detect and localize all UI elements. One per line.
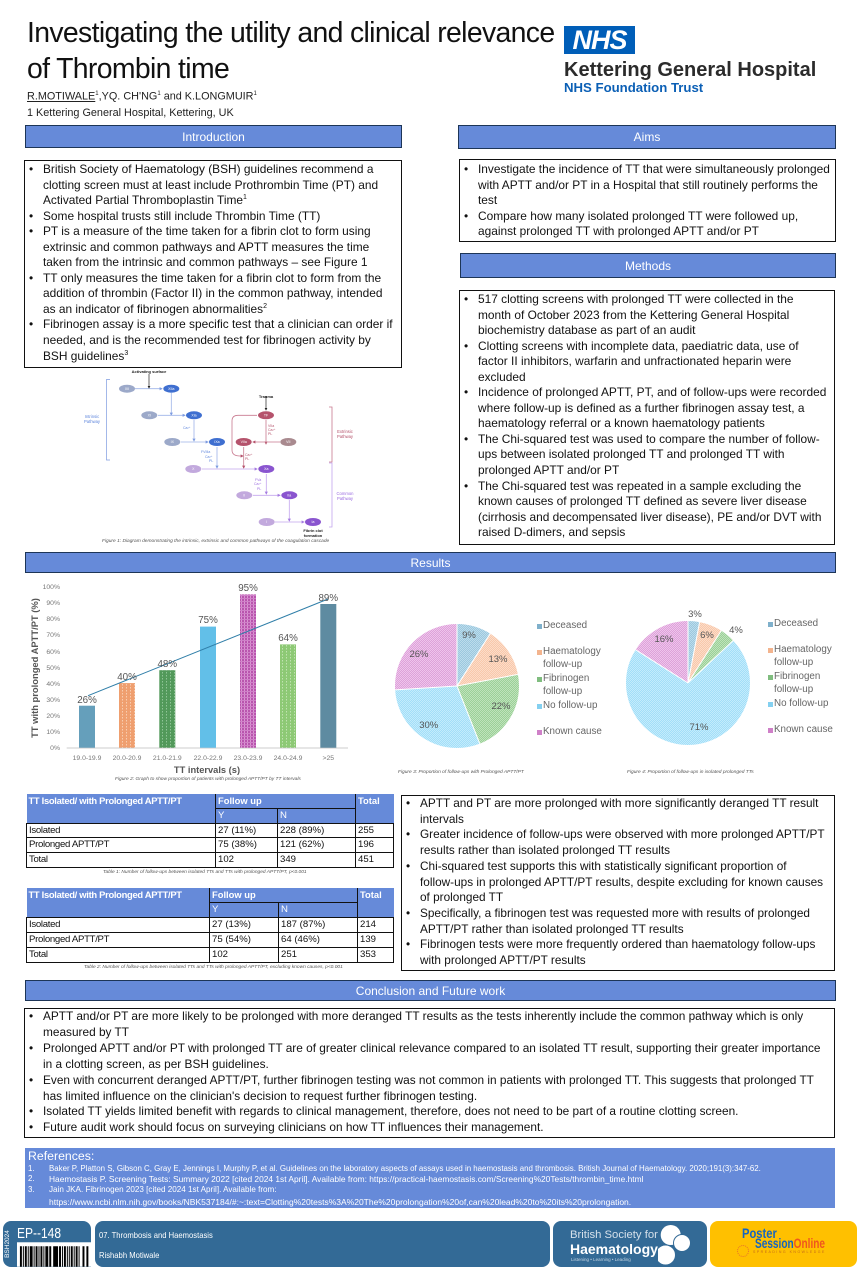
panel: methods text (459, 290, 835, 545)
panel: methods text: known causes of prolonged TT defined as severe liver disease (478, 494, 807, 508)
trust name: NHS Foundation Trust (564, 80, 703, 95)
caption: figure 1: Figure 1: Diagram demonstrating the intrinsic, extrinsic and common pathways of the coagulation cascade (102, 539, 329, 544)
chart: coagulation cascade diagram: VII (286, 440, 290, 444)
legend item: Known cause: Known cause (774, 724, 833, 735)
chart: bar chart of TT intervals: 50% (46, 665, 60, 672)
society name: British Society for (570, 1229, 658, 1241)
table 1: follow-ups: Y (218, 810, 224, 821)
chart: bar chart of TT intervals: 90% (46, 600, 60, 607)
chart: coagulation cascade diagram: PL (209, 459, 213, 463)
legend: pie 1 (537, 620, 602, 737)
panel: results findings: Fibrinogen tests were more frequently ordered than haematology follow-ups (420, 937, 815, 951)
panel: aims text (459, 159, 836, 242)
heading: Results: Results (410, 556, 450, 570)
chart: coagulation cascade diagram: TF (264, 414, 268, 418)
chart: coagulation cascade diagram: II (243, 494, 245, 498)
panel: methods text: The Chi-squared test was repeated in a sample excluding the (478, 479, 801, 493)
chart: pie of follow-ups with prolonged APTT/PT: 22% (491, 701, 511, 712)
authors: 1 Kettering General Hospital, Kettering, UK (27, 107, 234, 119)
chart: bar chart of TT intervals: 75% (198, 615, 218, 626)
panel: results findings: intervals (420, 812, 464, 826)
panel: conclusion text: Isolated TT yields limited benefit with regards to clinical management, therefore, does not need to be part of a routine clotting screen. (43, 1104, 738, 1118)
panel: introduction text: extrinsic and common pathways and APTT measures the time (43, 240, 369, 254)
panel: methods text: excluded (478, 370, 526, 384)
reference list: Baker P, Platton S, Gibson C, Gray E, Jennings I, Murphy P, et al. Guidelines on the laboratory aspects of assays used in haemostasis and thrombosis. British Journal of Haematology. 2020;191(3):347-62. (49, 1164, 761, 1173)
chart: bar chart of TT intervals: 0% (50, 745, 60, 752)
legend item: Fibrinogen follow-up: Fibrinogen (543, 673, 589, 684)
panel: references (25, 1148, 835, 1208)
chart: bar chart of TT intervals: 30% (46, 697, 60, 704)
panel: methods text: Incidence of prolonged APTT, PT, and of follow-ups were recorded (478, 385, 826, 399)
authors (27, 90, 257, 119)
footer: session and presenter (95, 1221, 550, 1267)
title: Investigating the utility and clinical relevance (27, 17, 554, 49)
panel: methods text: raised D-dimers, and sepsis (478, 525, 625, 539)
title: of Thrombin time (27, 52, 229, 84)
caption: figure 4: Figure 4: Proportion of follow-ups in isolated prolonged TTs (627, 770, 754, 775)
panel: methods text: where follow-up is defined as a further fibrinogen assay test, a (478, 401, 805, 415)
table 2: follow-ups excluding known causes: 27 (13%) (212, 919, 251, 930)
panel: conclusion text: has limited influence on the clinician's decision to request further fibrinogen testing. (43, 1089, 477, 1103)
panel: results findings: results rather than isolated prolonged TT results (420, 843, 670, 857)
word: Session Online: SessionOnline (755, 1235, 825, 1251)
panel: methods text: 517 clotting screens with prolonged TT were collected in the (478, 292, 794, 306)
chart: bar chart of TT intervals: TT with prolonged APTT/PT (%) (29, 598, 40, 738)
chart: coagulation cascade diagram: Trauma (259, 394, 274, 399)
panel: introduction text: Activated Partial Thromboplastin Time1 (43, 193, 247, 207)
table 2: follow-ups excluding known causes: Prolonged APTT/PT (29, 934, 109, 945)
chart: coagulation cascade diagram: Ca²⁺ (254, 482, 262, 486)
chart: coagulation cascade diagram: FVIIIa (201, 450, 210, 454)
panel: results findings: APTT/PT rather than isolated prolonged TT results (420, 922, 684, 936)
table 1: follow-ups: N (280, 810, 287, 821)
legend item: Haematology follow-up: follow-up (543, 659, 582, 670)
panel: aims text: with APTT and/or PT in a Hospital that still routinely performs the (478, 178, 818, 192)
logo: Kettering General Hospital NHS (564, 25, 816, 95)
panel: results findings: of prolonged TT (420, 890, 503, 904)
legend item: No follow-up: No follow-up (774, 698, 828, 709)
chart: pie of follow-ups with prolonged APTT/PT (395, 624, 519, 748)
panel: introduction text: as an indicator of fibrinogen abnormalities2 (43, 302, 267, 316)
reference list: 1. (28, 1164, 35, 1173)
panel: methods text: The Chi-squared test was used to compare the number of follow- (478, 432, 820, 446)
table 2: follow-ups excluding known causes (26, 888, 394, 963)
chart: coagulation cascade diagram: Pathway (84, 419, 101, 424)
chart: coagulation cascade diagram: XI (148, 414, 151, 418)
panel: results findings: follow-ups in prolonged APTT/PT results, despite excluding for known causes (420, 875, 823, 889)
poster number: EP--148 (17, 1225, 61, 1242)
panel: methods text: factor II inhibitors, warfarin and unfractionated heparin were (478, 354, 791, 368)
icon: three circles (658, 1225, 690, 1264)
barcode (17, 1242, 91, 1267)
chart: pie of follow-ups in isolated prolonged TT: 3% (688, 609, 702, 620)
chart: pie of follow-ups with prolonged APTT/PT: 9% (462, 630, 476, 641)
panel: methods text: Clotting screens with incomplete data, paediatric data, use of (478, 339, 799, 353)
chart: coagulation cascade diagram: Activating surface (132, 369, 167, 374)
chart: coagulation cascade diagram: XII (125, 387, 129, 391)
legend item: Haematology follow-up (768, 644, 832, 668)
chart: coagulation cascade diagram: Ia (312, 520, 315, 524)
chart: coagulation cascade diagram: Fibrin clot (303, 528, 323, 533)
table 1: follow-ups: Total (358, 795, 380, 806)
heading: Results (25, 552, 836, 573)
chart: bar chart of TT intervals: 95% (238, 583, 258, 594)
legend item: Deceased: Deceased (543, 620, 587, 631)
panel: aims text: Compare how many isolated prolonged TT were followed up, (478, 209, 798, 223)
vertical tag: BSH2024 (4, 1230, 11, 1258)
panel: results findings: Greater incidence of follow-ups were observed with more prolonged APTT/PT (420, 827, 825, 841)
chart: bar chart of TT intervals: 89% (318, 593, 338, 604)
reference list: https://www.ncbi.nlm.nih.gov/books/NBK537184/#:~:text=Clotting%20tests%3A%20The%20prolongation%20of,can%20lead%20to%20its%20prolongation. (49, 1196, 631, 1206)
chart: pie of follow-ups with prolonged APTT/PT: 13% (488, 654, 508, 665)
panel: methods text: prolonged APTT and/or PT (478, 463, 619, 477)
legend item: Haematology follow-up: Haematology (774, 644, 832, 655)
panel: results findings: Chi-squared test supports this with statistically significant proportion of (420, 859, 787, 873)
panel: introduction text: PT is a measure of the time taken for a fibrin clot to form using (43, 224, 371, 238)
table 1: follow-ups: 75 (38%) (218, 839, 257, 850)
table 1: follow-ups: 27 (11%) (218, 824, 256, 836)
table 1: follow-ups: 451 (358, 854, 374, 865)
reference list (28, 1164, 761, 1206)
reference list: Haemostasis P. Screening Tests: Summary 2022 [cited 2024 1st April]. Available from: https://practical-haemostasis.com/Screening%20Tests/thrombin_time.html (49, 1174, 643, 1184)
table 2: follow-ups excluding known causes: 353 (360, 949, 376, 960)
word: Poster: Poster (742, 1225, 777, 1241)
legend item: Fibrinogen follow-up: Fibrinogen (774, 671, 820, 682)
legend item: No follow-up: No follow-up (543, 700, 597, 711)
chart: pie of follow-ups in isolated prolonged TT: 16% (654, 634, 674, 645)
heading: Aims: Aims (634, 130, 660, 144)
panel: aims text: test (478, 193, 497, 207)
table 2: follow-ups excluding known causes: 251 (281, 949, 297, 960)
table 1: follow-ups (26, 794, 394, 868)
chart: bar chart of TT intervals: >25 (323, 755, 334, 762)
chart: coagulation cascade diagram: PL (268, 432, 272, 436)
authors: R.MOTIWALE1,YQ. CH'NG1 and K.LONGMUIR1 (27, 91, 257, 103)
chart: bar chart of TT intervals: 24.0-24.9 (274, 755, 303, 762)
panel: conclusion text: Even with concurrent deranged APTT/PT, further fibrinogen testing was not common in patients with prolonged TT. This suggests that prolonged TT (43, 1073, 814, 1087)
table 2: follow-ups excluding known causes: N (281, 904, 288, 915)
chart: coagulation cascade diagram: IXa (214, 440, 220, 444)
heading: Methods: Methods (625, 259, 671, 273)
reference list: Jain JKA. Fibrinogen 2023 [cited 2024 1st April]. Available from: (49, 1185, 277, 1194)
panel: methods text: ups between isolated prolonged TT and prolonged TT with (478, 447, 785, 461)
chart: coagulation cascade diagram: PL (257, 487, 261, 491)
table 2: follow-ups excluding known causes: 214 (360, 919, 376, 930)
panel: results findings: with prolonged APTT/PT results (420, 953, 586, 967)
session title: 07. Thrombosis and Haemostasis (99, 1230, 213, 1240)
chart: coagulation cascade diagram: Ca²⁺ (268, 428, 276, 432)
panel: methods text: (cirrhosis and decompensated liver disease), PE and/or DVT with (478, 510, 821, 524)
panel: results findings: APTT and PT are more prolonged with more significantly deranged TT result (420, 796, 818, 810)
chart: bar chart of TT intervals: 26% (77, 695, 97, 706)
panel: conclusion text: APTT and/or PT are more likely to be prolonged with more deranged TT results as the tests inherently include the common pathway which is only (43, 1009, 803, 1023)
panel: results findings (401, 795, 835, 971)
panel: introduction text: TT only measures the time taken for a fibrin clot to form from the (43, 271, 381, 285)
chart: coagulation cascade diagram: Pathway (337, 496, 354, 501)
icon: NHS lozenge: NHS (572, 25, 626, 55)
footer: poster ID and barcode (3, 1221, 91, 1267)
chart: bar chart of TT intervals: 48% (157, 659, 177, 670)
tagline: SPREADING KNOWLEDGE (753, 1250, 826, 1254)
table 2: follow-ups excluding known causes: 64 (46%) (281, 934, 320, 945)
chart: coagulation cascade diagram: PL (245, 457, 249, 461)
table 2: follow-ups excluding known causes: 102 (212, 949, 228, 960)
caption: table 2: Table 2: Number of follow-ups between isolated TTs and TTs with prolonged APTT/PT, excluding known causes, p<0.001 (84, 965, 343, 970)
reference list: 3. (28, 1185, 35, 1194)
panel: conclusion text: Prolonged APTT and/or PT with prolonged TT are of greater clinical relevance compared to an isolated TT result, supporting their greater importance (43, 1041, 821, 1055)
chart: bar chart of TT intervals: 64% (278, 633, 298, 644)
panel: introduction text: taken from the intrinsic and common pathways – see Figure 1 (43, 255, 368, 269)
legend item: Fibrinogen follow-up: follow-up (774, 684, 813, 695)
table 1: follow-ups: 102 (218, 854, 234, 865)
icon: dotted globe (737, 1245, 749, 1257)
caption: table 1: Table 1: Number of follow-ups between isolated TTs and TTs with prolonged APTT/PT, p<0.001 (103, 870, 307, 875)
chart: bar chart of TT intervals: 19.0-19.9 (73, 755, 102, 762)
chart: bar chart of TT intervals: 100% (43, 584, 60, 591)
table 2: follow-ups excluding known causes: Y (212, 904, 218, 915)
logo: Poster Session Online (710, 1221, 857, 1267)
table 2: follow-ups excluding known causes: 139 (360, 934, 376, 945)
chart: coagulation cascade diagram: Extrinsic (337, 429, 353, 434)
chart: bar chart of TT intervals (29, 583, 348, 775)
heading: Methods (460, 253, 836, 278)
chart: bar chart of TT intervals: 22.0-22.9 (194, 755, 223, 762)
chart: bar chart of TT intervals: TT intervals (s) (174, 765, 240, 775)
caption: figure 2: Figure 2: Graph to show proportion of patients with prolonged APTT/PT by TT intervals (115, 777, 301, 782)
chart: pie of follow-ups with prolonged APTT/PT: 30% (419, 720, 439, 731)
table 1: follow-ups: 196 (358, 839, 374, 850)
chart: bar chart of TT intervals: 70% (46, 632, 60, 639)
chart: bar chart of TT intervals: 21.0-21.9 (153, 755, 182, 762)
chart: coagulation cascade diagram: XIa (191, 414, 197, 418)
chart: pie of follow-ups in isolated prolonged TT (626, 609, 750, 745)
legend item: Fibrinogen follow-up (537, 673, 589, 697)
chart: bar chart of TT intervals: 80% (46, 616, 60, 623)
legend item: Haematology follow-up: Haematology (543, 646, 601, 657)
heading: Introduction (25, 125, 402, 148)
chart: coagulation cascade diagram: Xa (264, 467, 268, 471)
heading: Introduction: Introduction (182, 130, 245, 144)
panel: results findings: Specifically, a fibrinogen test was requested more with results of prolonged (420, 906, 810, 920)
table 1: follow-ups: 255 (358, 824, 374, 836)
chart: coagulation cascade diagram: I (266, 520, 267, 524)
legend: pie 2 (768, 618, 833, 735)
chart: pie of follow-ups in isolated prolonged TT: 71% (689, 722, 709, 733)
chart: bar chart of TT intervals: 23.0-23.9 (234, 755, 263, 762)
tagline: Listening • Learning • Leading (571, 1257, 631, 1262)
panel: conclusion text: in a clotting screen, as per BSH guidelines. (43, 1057, 269, 1071)
panel: conclusion text: Future audit work should focus on surveying clinicians on how TT influences their management. (43, 1120, 544, 1134)
heading: References: References: (28, 1149, 94, 1163)
chart: coagulation cascade diagram: formation (304, 533, 323, 538)
chart: coagulation cascade diagram: Ca²⁺ (183, 426, 191, 430)
chart: coagulation cascade diagram: Ca²⁺ (205, 455, 213, 459)
panel: aims text: Investigate the incidence of TT that were simultaneously prolonged (478, 162, 830, 176)
table 1: follow-ups: Prolonged APTT/PT (29, 839, 109, 850)
caption: figure 3: Figure 3: Proportion of follow-ups with Prolonged APTT/PT (398, 770, 524, 775)
table 1: follow-ups: 349 (280, 854, 296, 865)
table 2: follow-ups excluding known causes: Total (360, 889, 382, 900)
panel: introduction text: clotting screen must at least include Prothrombin Time (PT) and (43, 178, 378, 192)
chart: coagulation cascade diagram: Intrinsic (85, 414, 99, 419)
hospital name: Kettering General Hospital (564, 59, 816, 81)
legend item: Haematology follow-up: follow-up (774, 657, 813, 668)
chart: coagulation cascade diagram: X (192, 467, 195, 471)
chart: bar chart of TT intervals: 20.0-20.9 (113, 755, 142, 762)
chart: bar chart of TT intervals: 40% (117, 672, 137, 683)
chart: coagulation cascade diagram: IIa (287, 494, 291, 498)
chart: bar chart of TT intervals: 20% (46, 713, 60, 720)
panel: introduction text: addition of thrombin (Factor II) in the common pathway, intended (43, 286, 382, 300)
heading: Conclusion and Future work: Conclusion and Future work (356, 984, 505, 998)
chart: coagulation cascade diagram: VIIa (268, 424, 274, 428)
chart: pie of follow-ups in isolated prolonged TT: 4% (729, 625, 743, 636)
chart: bar chart of TT intervals: 40% (46, 681, 60, 688)
table 1: follow-ups: Follow up (218, 795, 262, 806)
table 2: follow-ups excluding known causes: Total (29, 949, 48, 960)
chart: pie of follow-ups with prolonged APTT/PT: 26% (409, 649, 429, 660)
title (27, 17, 554, 84)
table 2: follow-ups excluding known causes: 187 (87%) (281, 919, 325, 930)
logo: British Society for Haematology (553, 1221, 707, 1267)
chart: coagulation cascade diagram (84, 369, 354, 538)
chart: pie of follow-ups in isolated prolonged TT: 6% (700, 630, 714, 641)
panel: introduction text: BSH guidelines3 (43, 349, 128, 363)
table 1: follow-ups: TT Isolated/ with Prolonged APTT/PT (28, 795, 182, 806)
panel: conclusion text: measured by TT (43, 1025, 129, 1039)
chart: coagulation cascade diagram: Pathway (337, 434, 354, 439)
table 1: follow-ups: 228 (89%) (280, 824, 324, 836)
chart: coagulation cascade diagram: Ca²⁺ (245, 453, 253, 457)
panel: methods text: biochemistry database as part of an audit (478, 323, 695, 337)
chart: coagulation cascade diagram: FVa (255, 478, 261, 482)
panel: methods text: month of October 2023 from the Kettering General Hospital (478, 308, 789, 322)
table 1: follow-ups: Isolated (29, 824, 60, 836)
panel: introduction text (24, 160, 402, 368)
heading: Conclusion and Future work (25, 980, 836, 1001)
chart: coagulation cascade diagram: VIIa (241, 440, 247, 444)
panel: conclusion text (24, 1008, 835, 1138)
legend item: Haematology follow-up (537, 646, 601, 670)
chart: coagulation cascade diagram: Common (336, 491, 354, 496)
legend item: Fibrinogen follow-up (768, 671, 820, 695)
panel: introduction text: Some hospital trusts still include Thrombin Time (TT) (43, 209, 320, 223)
heading: Aims (458, 125, 836, 149)
legend item: Known cause: Known cause (543, 726, 602, 737)
presenter: Rishabh Motiwale (99, 1250, 159, 1260)
legend item: Fibrinogen follow-up: follow-up (543, 686, 582, 697)
chart: bar chart of TT intervals: 10% (46, 729, 60, 736)
panel: introduction text: Fibrinogen assay is a more specific test that a clinician can order if (43, 317, 393, 331)
panel: introduction text: needed, and is the recommended test for fibrinogen activity by (43, 333, 371, 347)
table 2: follow-ups excluding known causes: TT Isolated/ with Prolonged APTT/PT (28, 889, 182, 900)
chart: bar chart of TT intervals: 60% (46, 649, 60, 656)
panel: aims text: against prolonged TT with prolonged APTT and/or PT (478, 224, 759, 238)
legend item: Deceased: Deceased (774, 618, 818, 629)
Haematology wordmark: Haematology (570, 1241, 658, 1257)
panel: methods text: haematology referral or a known haematology patients (478, 416, 765, 430)
table 1: follow-ups: Total (29, 854, 48, 865)
table 2: follow-ups excluding known causes: Isolated (29, 919, 60, 930)
chart: coagulation cascade diagram: IX (171, 440, 175, 444)
chart: coagulation cascade diagram: XIIa (168, 387, 174, 391)
panel: introduction text: British Society of Haematology (BSH) guidelines recommend a (43, 162, 373, 176)
table 2: follow-ups excluding known causes: 75 (54%) (212, 934, 251, 945)
table 2: follow-ups excluding known causes: Follow up (212, 889, 256, 900)
table 1: follow-ups: 121 (62%) (280, 839, 324, 850)
reference list: 2. (28, 1174, 35, 1183)
